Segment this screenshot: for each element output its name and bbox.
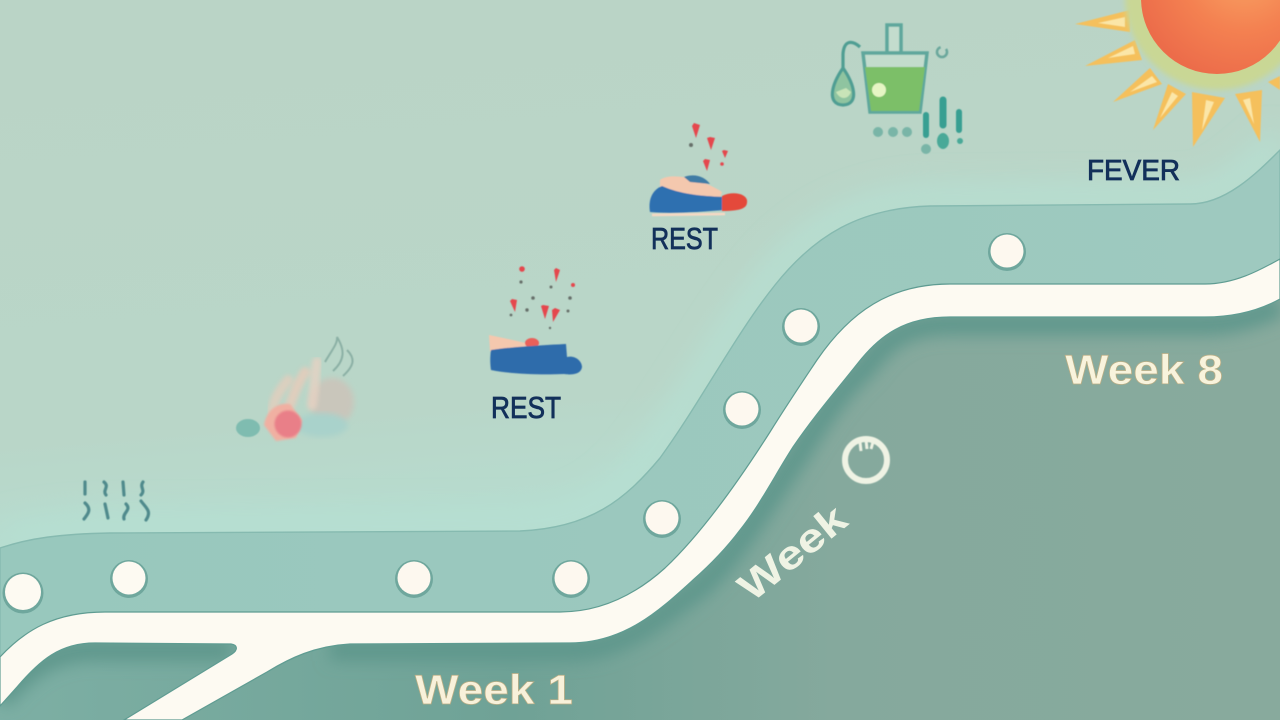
lower ground xyxy=(0,259,1280,720)
timeline dot 8 xyxy=(988,233,1026,271)
lower ground shadow under road xyxy=(0,305,1280,700)
icon: second person resting xyxy=(650,175,747,215)
timeline dot 5 xyxy=(643,500,681,538)
label: Week 1: Week 1 xyxy=(415,666,573,713)
icon: green drink and droplets xyxy=(832,25,963,154)
icon: first person resting xyxy=(489,335,582,374)
icon: sun with rays xyxy=(1075,0,1280,147)
icon: faded inflamed tissue xyxy=(236,337,354,441)
icon: red particles over first bed xyxy=(510,266,575,329)
timeline dot 4 xyxy=(552,560,590,598)
label: Week (rotated): Week xyxy=(730,496,856,610)
timeline dot 7 xyxy=(782,308,820,346)
label: Week 8: Week 8 xyxy=(1065,346,1223,393)
timeline dot 3 xyxy=(395,560,433,598)
light halo along the band edge xyxy=(0,142,1280,540)
timeline dot 1 xyxy=(2,572,44,614)
label: REST lower: REST xyxy=(491,390,561,425)
icon: red particles over second bed xyxy=(689,123,728,171)
icon: clock ring xyxy=(845,439,887,481)
timeline dot 6 xyxy=(723,391,761,429)
label: FEVER: FEVER xyxy=(1087,155,1180,187)
white road xyxy=(0,259,1280,720)
icon: wavy symptom marks xyxy=(84,482,149,520)
timeline dot 2 xyxy=(110,560,148,598)
label: REST upper: REST xyxy=(651,221,718,256)
teal band behind the road xyxy=(0,150,1280,720)
